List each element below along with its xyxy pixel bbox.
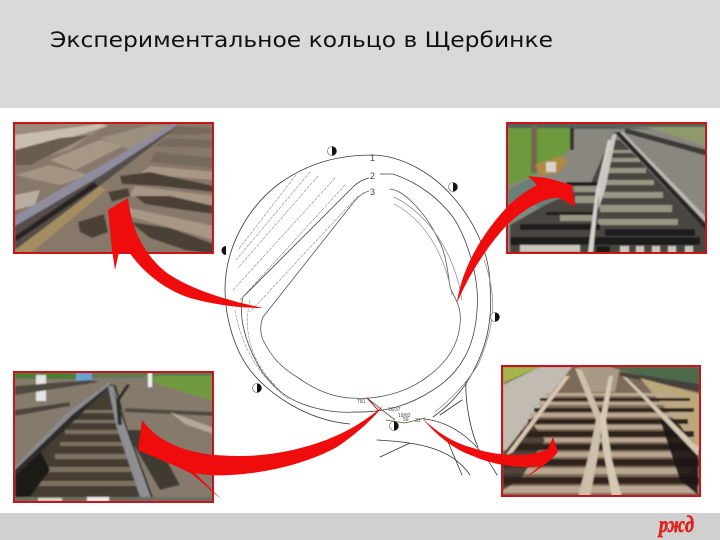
header band <box>0 0 720 108</box>
photo: switch with green verge, top right <box>506 122 707 254</box>
arrow: to bottom-right photo <box>422 418 558 478</box>
track 2 <box>241 174 477 412</box>
track numbers: 59 <box>403 417 409 423</box>
photo: frog crossing, bottom right <box>501 365 701 497</box>
track numbers <box>357 153 421 424</box>
arrow: to bottom-left photo <box>138 406 383 500</box>
photo: curved track, bottom left <box>13 371 214 503</box>
photo: rail close-up, top left <box>13 122 214 254</box>
title: Экспериментальное кольцо в Щербинке <box>50 28 553 52</box>
outer track 1 <box>225 155 491 424</box>
track ring diagram <box>222 146 500 475</box>
inner right arcs <box>394 197 493 412</box>
branch lines lower right <box>377 382 497 475</box>
track numbers: 31 <box>415 418 421 424</box>
track numbers: 3 <box>370 187 375 197</box>
signal: half-circle icons <box>222 146 500 430</box>
footer band <box>0 513 720 540</box>
junction cross lines <box>367 398 425 423</box>
arrow: to top-right photo <box>457 176 575 303</box>
track numbers: 19/82 <box>398 413 411 419</box>
track numbers: 1 <box>370 153 375 163</box>
track 3 <box>261 189 460 398</box>
track numbers: 2 <box>370 171 375 181</box>
parallel sidings <box>233 172 358 400</box>
logo: RZD: ржд <box>657 512 694 537</box>
track numbers: Т81 <box>357 399 366 405</box>
arrow: to top-left photo <box>108 198 263 308</box>
track numbers: 16/37 <box>388 407 401 413</box>
